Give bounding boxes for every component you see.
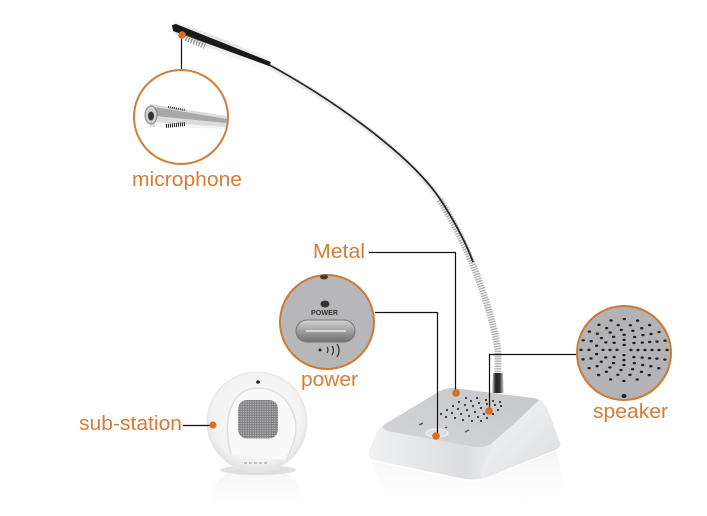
panel: microphone callout (132, 31, 242, 191)
panel: metal callout (313, 241, 460, 397)
marker: metal (452, 389, 460, 397)
plug collar (492, 373, 504, 393)
leader line: sub-station (183, 424, 212, 426)
marker: sub-station (210, 422, 216, 428)
label: speaker: speaker (593, 401, 668, 423)
speaker holes on base (440, 397, 502, 422)
panel: power callout (280, 274, 440, 440)
gooseneck (262, 61, 498, 376)
panel: speaker callout (485, 306, 671, 423)
infographic: desk microphone parts (80, 23, 672, 480)
circle: microphone detail (134, 70, 228, 164)
leader line: microphone (180, 35, 182, 70)
sub-station unit (207, 372, 307, 475)
marker: microphone (178, 31, 186, 39)
label: microphone: microphone (132, 169, 242, 191)
sub-station reflection (212, 467, 302, 516)
leader line: speaker (490, 354, 576, 410)
label: Metal: Metal (313, 241, 365, 263)
desk base (369, 373, 560, 480)
circle: power detail (280, 274, 374, 369)
base button and marks (426, 429, 448, 437)
panel: sub-station callout (79, 413, 216, 435)
leader line: power (375, 312, 438, 435)
base reflection (372, 451, 566, 516)
circle: speaker grille (577, 306, 671, 400)
leader line: metal (369, 252, 456, 392)
marker: power (432, 432, 440, 440)
label: power: power (301, 369, 358, 391)
circle: power detail: POWER (311, 308, 339, 317)
label: sub-station: sub-station (79, 413, 182, 435)
microphone head (172, 20, 271, 71)
marker: speaker (485, 407, 493, 415)
